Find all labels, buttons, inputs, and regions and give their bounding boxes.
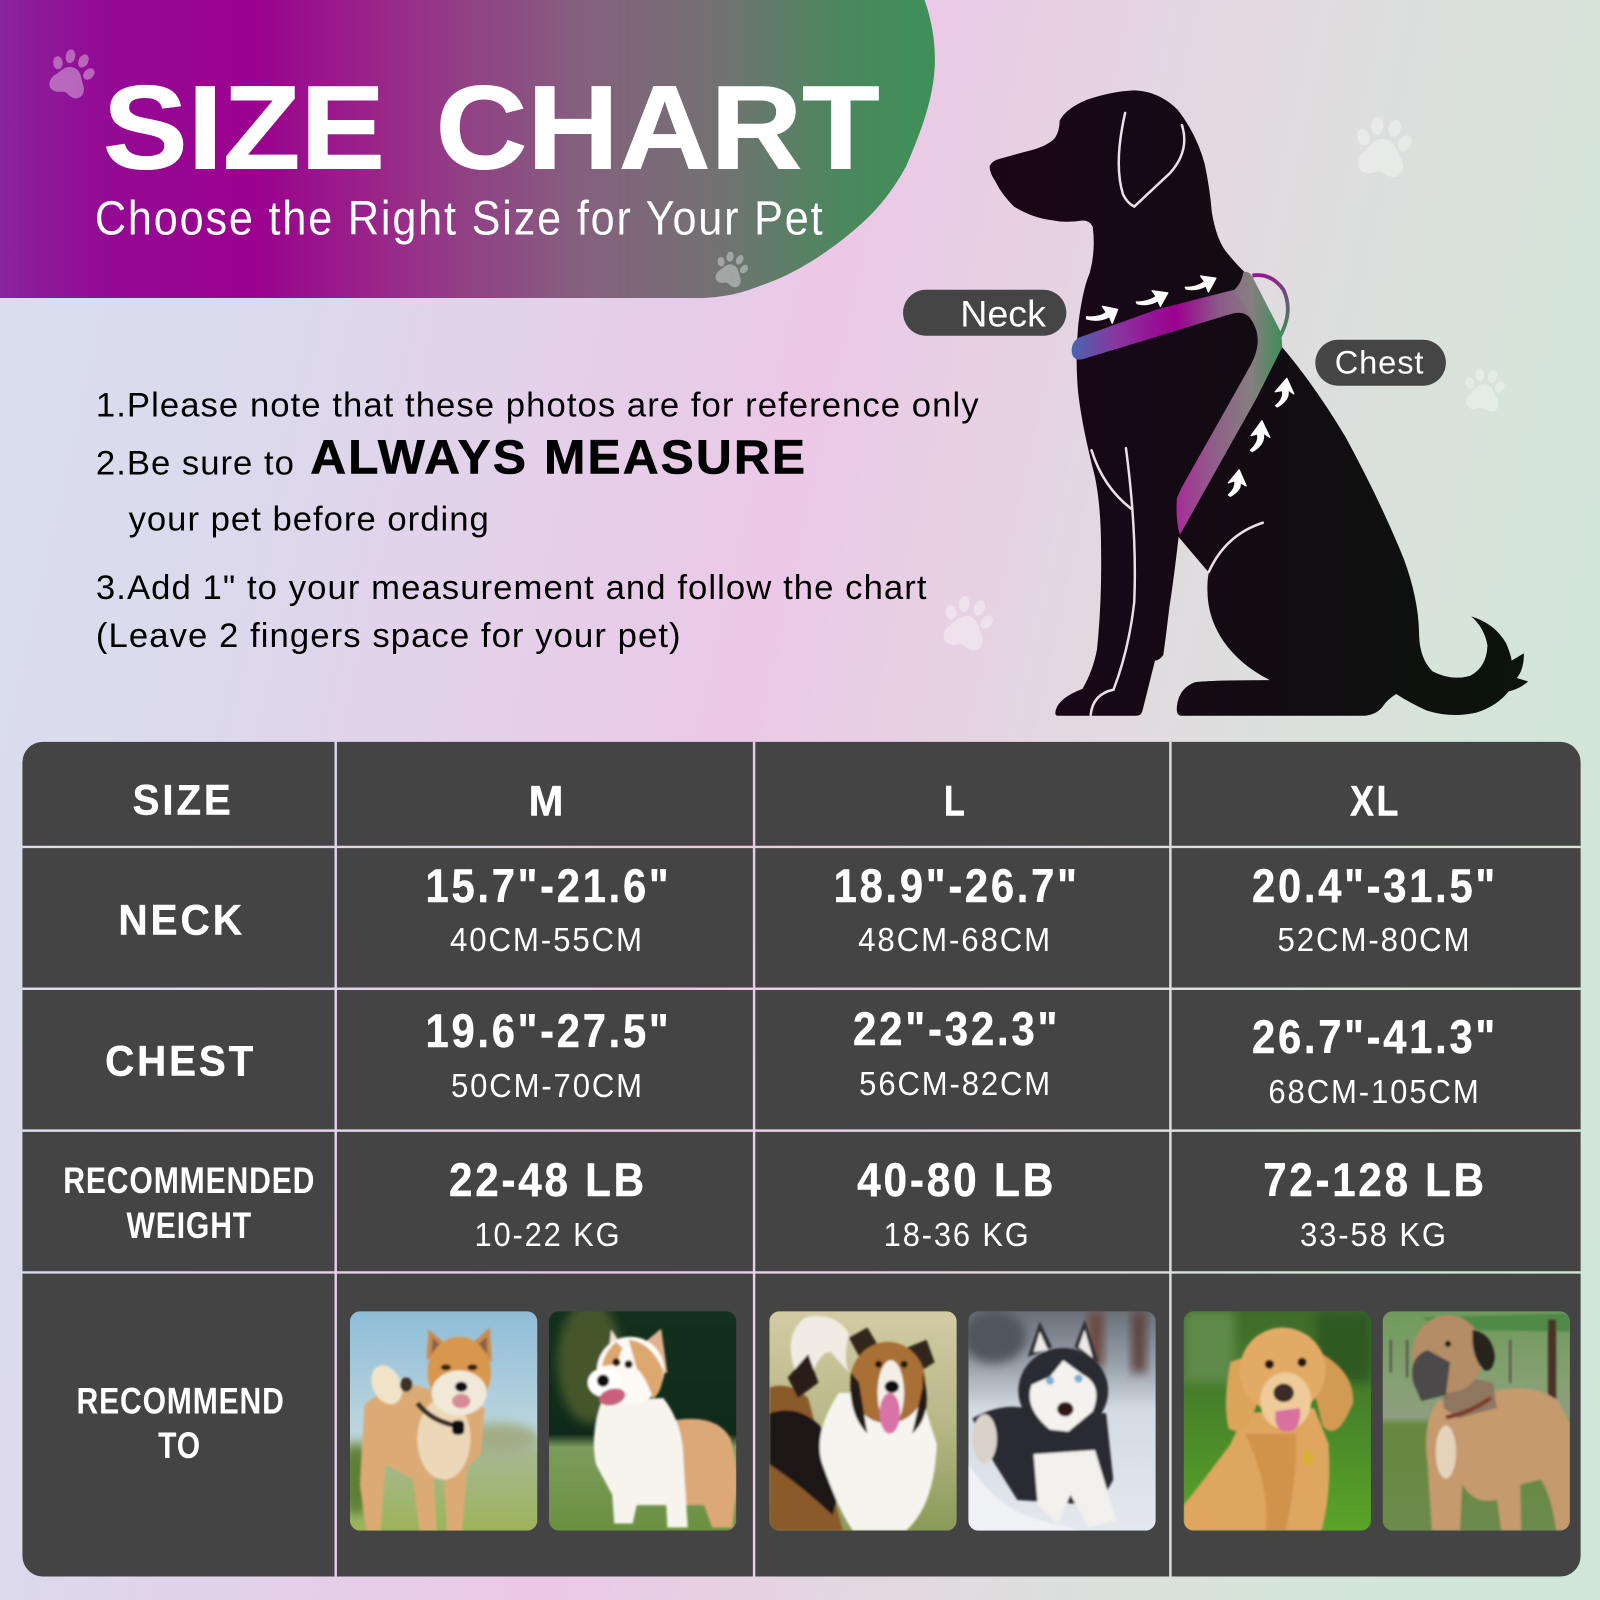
ear and leg highlight lines	[1091, 113, 1263, 715]
header row: XL	[1350, 777, 1401, 825]
chest row: 50CM-70CM	[451, 1068, 644, 1105]
icon: paw banner bottom	[710, 248, 753, 290]
instructions text block: (Leave 2 fingers space for your pet)	[96, 617, 681, 655]
label: chest	[1315, 340, 1446, 386]
header row: L	[944, 777, 967, 825]
title: SIZE CHART	[103, 62, 880, 194]
neck row: 52CM-80CM	[1278, 922, 1471, 959]
neck row	[118, 860, 1498, 959]
instructions text block: ALWAYS MEASURE	[310, 431, 807, 484]
harness chest strap	[1177, 272, 1282, 535]
weight row: RECOMMENDED	[63, 1160, 315, 1201]
label: chest: Chest	[1335, 343, 1423, 380]
chest row: 68CM-105CM	[1268, 1074, 1481, 1111]
chest row: 22"-32.3"	[853, 1003, 1060, 1055]
weight row: 33-58 KG	[1300, 1217, 1448, 1254]
harness neck strap	[1072, 290, 1250, 360]
weight row: WEIGHT	[127, 1205, 252, 1246]
weight row: 10-22 KG	[474, 1217, 621, 1254]
label: neck: Neck	[960, 294, 1047, 335]
instructions text block	[96, 386, 979, 655]
instructions text block: 1.Please note that these photos are for reference only	[96, 386, 979, 424]
icon: paw near text	[935, 591, 999, 654]
neck row: 18.9"-26.7"	[834, 860, 1080, 912]
chest row: 26.7"-41.3"	[1252, 1011, 1498, 1063]
icon: paw top right	[1350, 113, 1417, 179]
neck row: 48CM-68CM	[858, 922, 1052, 959]
arrows neck	[1087, 276, 1294, 496]
arrows chest	[1228, 470, 1246, 496]
weight row: 18-36 KG	[884, 1217, 1031, 1254]
size table	[22, 742, 1581, 1577]
photo: great dane	[1383, 1311, 1570, 1531]
weight row: 40-80 LB	[857, 1154, 1056, 1206]
header banner	[0, 0, 935, 298]
photo: corgi	[549, 1301, 737, 1531]
header row	[133, 776, 1401, 825]
header row: M	[529, 777, 566, 825]
chest row	[105, 1003, 1498, 1111]
instructions text block: 2.Be sure to	[96, 444, 294, 482]
chest row: 19.6"-27.5"	[426, 1005, 671, 1057]
photo: husky	[961, 1310, 1156, 1531]
chest row: CHEST	[105, 1038, 256, 1086]
neck row: NECK	[118, 897, 245, 945]
photo: sheltie collie	[769, 1311, 957, 1531]
recommend row label	[77, 1380, 285, 1466]
harness loop	[1252, 275, 1288, 338]
weight row: 72-128 LB	[1263, 1154, 1487, 1206]
chest row: 56CM-82CM	[859, 1066, 1052, 1103]
neck row: 15.7"-21.6"	[426, 860, 671, 912]
neck row: 20.4"-31.5"	[1252, 860, 1498, 912]
dog silhouette with harness	[990, 90, 1528, 716]
photo: golden retriever	[1184, 1311, 1371, 1531]
weight row	[63, 1154, 1487, 1254]
recommend row label: RECOMMEND	[77, 1380, 285, 1421]
weight row: 22-48 LB	[449, 1154, 647, 1206]
header row: SIZE	[133, 776, 234, 824]
subtitle: Choose the Right Size for Your Pet	[95, 193, 824, 246]
label: neck	[903, 290, 1066, 336]
instructions text block: your pet before ording	[129, 501, 489, 539]
icon: paw banner left	[42, 43, 102, 103]
instructions text block: 3.Add 1" to your measurement and follow the chart	[96, 569, 927, 607]
icon: paw mid right	[1460, 366, 1508, 413]
neck row: 40CM-55CM	[450, 922, 644, 959]
recommend row label: TO	[158, 1425, 201, 1466]
photo: shiba inu	[340, 1311, 539, 1531]
